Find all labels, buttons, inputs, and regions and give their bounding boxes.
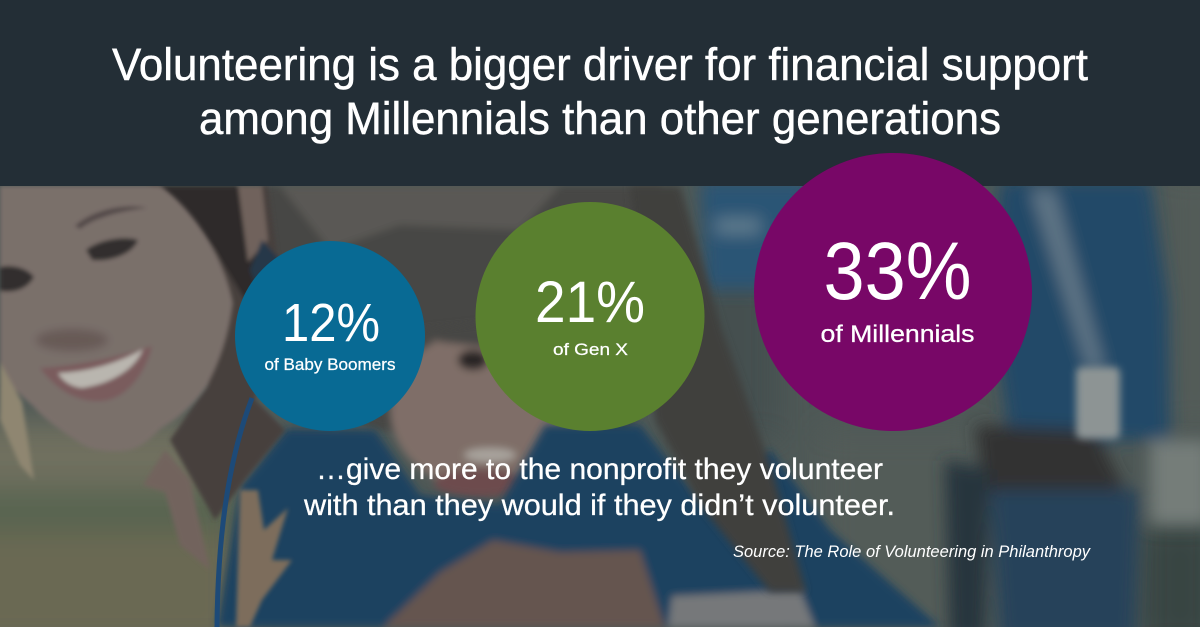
circle: Millennials 33%: of Millennials — [820, 321, 974, 348]
circle: Baby Boomers 12% — [235, 241, 425, 431]
shirts and child's arm — [217, 425, 940, 627]
circle: Baby Boomers 12%: of Baby Boomers — [264, 355, 396, 374]
circle: Gen X 21%: of Gen X — [553, 340, 628, 359]
title — [112, 39, 1088, 144]
title: Volunteering is a bigger driver for financial support — [112, 39, 1088, 90]
circle: Millennials 33% — [754, 153, 1032, 431]
child's hair — [262, 186, 700, 440]
circle: Baby Boomers 12%: 12% — [282, 293, 380, 353]
source note: Source: The Role of Volunteering in Philanthropy — [733, 542, 1091, 561]
circle: Millennials 33%: 33% — [824, 226, 972, 317]
caption text: with than they would if they didn’t volunteer. — [303, 489, 895, 522]
caption text: …give more to the nonprofit they volunteer — [316, 453, 883, 486]
background photo: volunteer hugging a child — [0, 170, 1200, 627]
child's face — [390, 315, 600, 497]
woman's neck, hair and hand — [143, 186, 285, 570]
stethoscope tube — [217, 398, 252, 627]
caption text — [303, 453, 895, 522]
circle: Gen X 21%: 21% — [535, 270, 645, 335]
child's long hair strand — [630, 186, 806, 592]
blurred field and crowd backdrop — [0, 170, 1200, 627]
title: among Millennials than other generations — [199, 93, 1001, 144]
hair strands over shirt — [236, 490, 292, 627]
header band — [0, 0, 1200, 186]
badge — [1076, 367, 1120, 439]
woman's face — [0, 186, 233, 480]
circle: Gen X 21% — [476, 202, 704, 431]
